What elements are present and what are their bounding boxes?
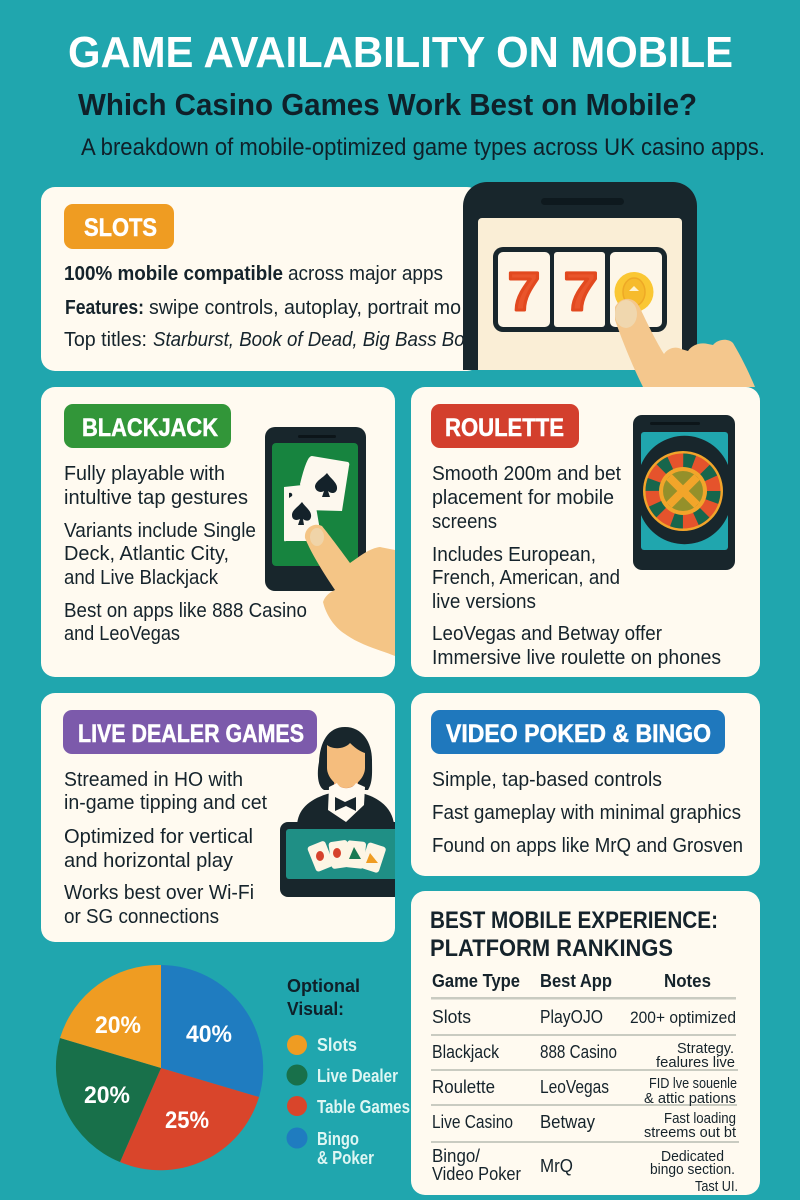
rankings heading: BEST MOBILE EXPERIENCE: [430,907,718,934]
rankings table: LeoVegas [540,1077,609,1097]
subtitle: Which Casino Games Work Best on Mobile? [78,87,697,122]
rankings table: & attic pations [644,1090,736,1107]
rankings table: 200+ optimized [630,1008,736,1027]
legend: Table Games [317,1097,410,1117]
badge: video poker and bingo: VIDEO POKED & BINGO [446,720,711,748]
legend: & Poker [317,1148,374,1168]
rankings table: Betway [540,1112,595,1132]
slots text: across major apps [288,263,443,285]
pie chart: 20% [84,1082,130,1109]
badge: roulette: ROULETTE [445,414,564,442]
blackjack text: Variants include Single [64,520,256,542]
live dealer text: Works best over Wi-Fi [64,882,254,904]
roulette text: Smooth 200m and bet [432,463,621,485]
pie chart: 20% [95,1012,141,1039]
blackjack text [64,463,307,645]
icon: dealer with card table [280,727,405,897]
video poker text [432,769,743,857]
badge: live dealer games [63,710,317,754]
title: GAME AVAILABILITY ON MOBILE [68,28,733,77]
rankings table: Tast UI. [695,1178,738,1195]
rankings table: MrQ [540,1156,573,1176]
rankings table: 888 Casino [540,1042,617,1062]
panel: roulette [411,387,760,677]
slot sevens [508,262,598,322]
rankings heading: PLATFORM RANKINGS [430,935,673,962]
rankings table: Dedicated [661,1148,724,1165]
rankings table [431,971,739,1195]
badge: video poker and bingo [431,710,725,754]
rankings table: PlayOJO [540,1007,603,1027]
dealer cards [307,840,387,873]
live dealer text: Optimized for vertical [64,826,253,848]
icon: hand [305,525,395,656]
pie chart: 25% [165,1107,209,1134]
slots text: 100% mobile compatible [64,263,283,285]
legend: Visual: [287,999,344,1019]
live dealer text: or SG connections [64,906,219,928]
roulette text: French, American, and [432,567,620,589]
rankings table: Roulette [432,1077,495,1097]
badge: live dealer games: LIVE DEALER GAMES [78,720,304,748]
slots text: swipe controls, autoplay, portrait mo [149,297,461,319]
roulette text: LeoVegas and Betway offer [432,623,662,645]
rankings table: Live Casino [432,1112,513,1132]
pie chart: 40% [186,1021,232,1048]
badge: slots: SLOTS [84,214,157,242]
rankings table: streems out bt [644,1124,737,1141]
live dealer text: in-game tipping and cet [64,792,267,814]
slots text: Features: [65,297,144,319]
rankings table: Best App [540,971,612,991]
roulette text: Immersive live roulette on phones [432,647,721,669]
legend: Slots [317,1035,357,1055]
pie chart [56,965,263,1170]
rankings table: Fast loading [664,1110,736,1127]
badge: blackjack: BLACKJACK [82,414,218,442]
rankings heading [430,907,718,962]
rankings table: Video Poker [432,1164,521,1184]
icon: phone with cards [265,427,395,656]
panel: slots [41,187,481,371]
panel: live dealer games [41,693,405,942]
slot sevens: 7 [508,262,540,322]
video poker text: Fast gameplay with minimal graphics [432,802,741,824]
live dealer text [64,769,267,928]
rankings table: Bingo/ [432,1146,480,1166]
badge: roulette [431,404,579,448]
roulette text: Includes European, [432,544,596,566]
blackjack text: intultive tap gestures [64,487,248,509]
slots text: Top titles: [64,329,147,351]
rankings table: Blackjack [432,1042,500,1062]
rankings table: fealures live [656,1054,735,1071]
panel: platform rankings [411,891,760,1195]
rankings table: Notes [664,971,711,991]
rankings table: Slots [432,1007,471,1027]
rankings table: bingo section. [650,1161,735,1178]
slots text [64,263,475,351]
icon: phone with slot machine [463,182,755,387]
blackjack text: Deck, Atlantic City, [64,543,229,565]
badge: slots [64,204,174,249]
roulette text [432,463,721,669]
slot sevens: 7 [564,262,598,322]
panel: video poker and bingo [411,693,760,876]
legend [286,976,410,1168]
legend: Optional [287,976,360,996]
legend: Bingo [317,1129,359,1149]
slots text: Starburst, Book of Dead, Big Bass Bon [153,329,475,351]
live dealer text: Streamed in HO with [64,769,243,791]
blackjack text: Fully playable with [64,463,225,485]
video poker text: Simple, tap-based controls [432,769,662,791]
coin [614,272,654,312]
blackjack text: and Live Blackjack [64,567,219,589]
live dealer text: and horizontal play [64,850,233,872]
rankings table: Strategy. [677,1040,734,1057]
roulette text: live versions [432,591,536,613]
roulette text: placement for mobile [432,487,614,509]
rankings table: Game Type [432,971,520,991]
video poker text: Found on apps like MrQ and Grosven [432,835,743,857]
blackjack text: Best on apps like 888 Casino [64,600,307,622]
legend: Live Dealer [317,1066,398,1086]
rankings table: FID lve souenle [649,1075,737,1092]
icon: hand [615,299,755,387]
panel: blackjack [41,387,395,677]
roulette text: screens [432,511,497,533]
badge: blackjack [64,404,231,448]
icon: phone with roulette wheel [633,415,735,570]
blackjack text: and LeoVegas [64,623,180,645]
